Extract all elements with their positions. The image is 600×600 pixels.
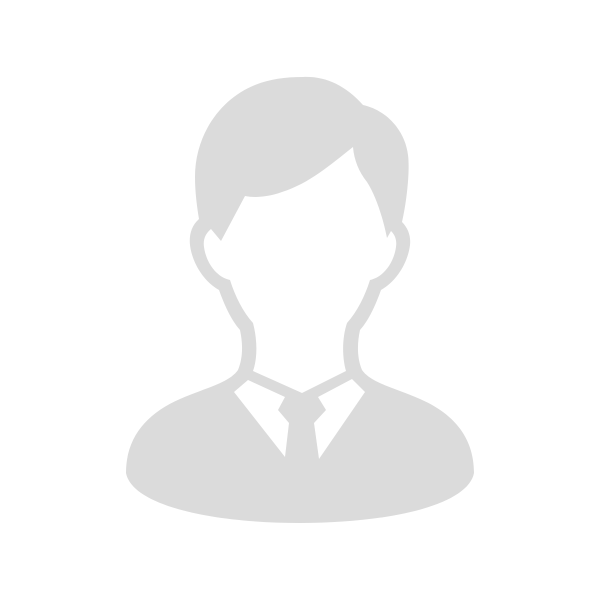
body and neck outline	[126, 200, 474, 523]
right shirt collar	[314, 379, 365, 459]
left shirt collar	[234, 380, 289, 457]
hair	[195, 77, 409, 241]
face opening	[204, 190, 396, 393]
